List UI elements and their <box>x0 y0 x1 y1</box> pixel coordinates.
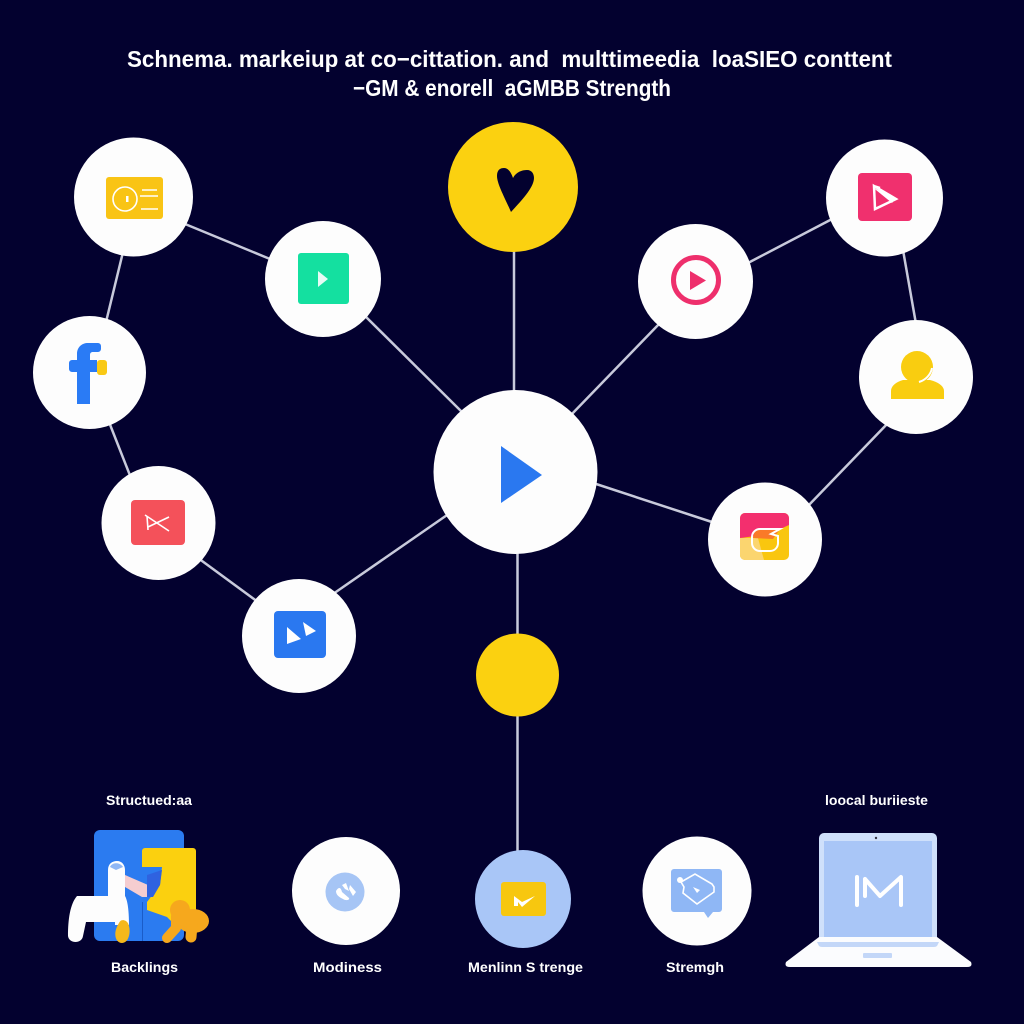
node: pink square <box>826 140 943 256</box>
node: mention <box>475 850 571 948</box>
laptop <box>786 833 972 967</box>
label: strength: Stremgh <box>666 959 724 975</box>
node: orange app <box>708 482 822 596</box>
label: backlings: Backlings <box>111 959 178 975</box>
node: yellow small <box>476 634 559 716</box>
node: blue forward <box>242 579 356 693</box>
title: Schnema. markeiup at co−cittation. and multtimeedia loaSIEO conttent <box>127 46 892 72</box>
network connector lines <box>106 218 916 855</box>
title <box>127 46 892 101</box>
label: mention strength: Menlinn S trenge <box>468 959 583 975</box>
illustration: puzzle with animals <box>68 830 209 943</box>
label: structured: Structued:aa <box>106 792 192 808</box>
node: red mail <box>102 466 216 580</box>
title: −GM & enorell aGMBB Strength <box>353 75 671 101</box>
node: person <box>859 320 973 434</box>
node: modiness <box>292 837 400 945</box>
node: ID card <box>74 138 193 256</box>
node: pink play <box>638 224 753 339</box>
node: central play <box>434 390 598 554</box>
node: strength <box>642 836 752 946</box>
node: facebook <box>33 316 146 429</box>
label: local business: loocal buriieste <box>825 792 928 808</box>
label: modiness: Modiness <box>313 959 382 975</box>
node: yellow heart <box>448 122 578 252</box>
node: green video <box>265 221 381 337</box>
